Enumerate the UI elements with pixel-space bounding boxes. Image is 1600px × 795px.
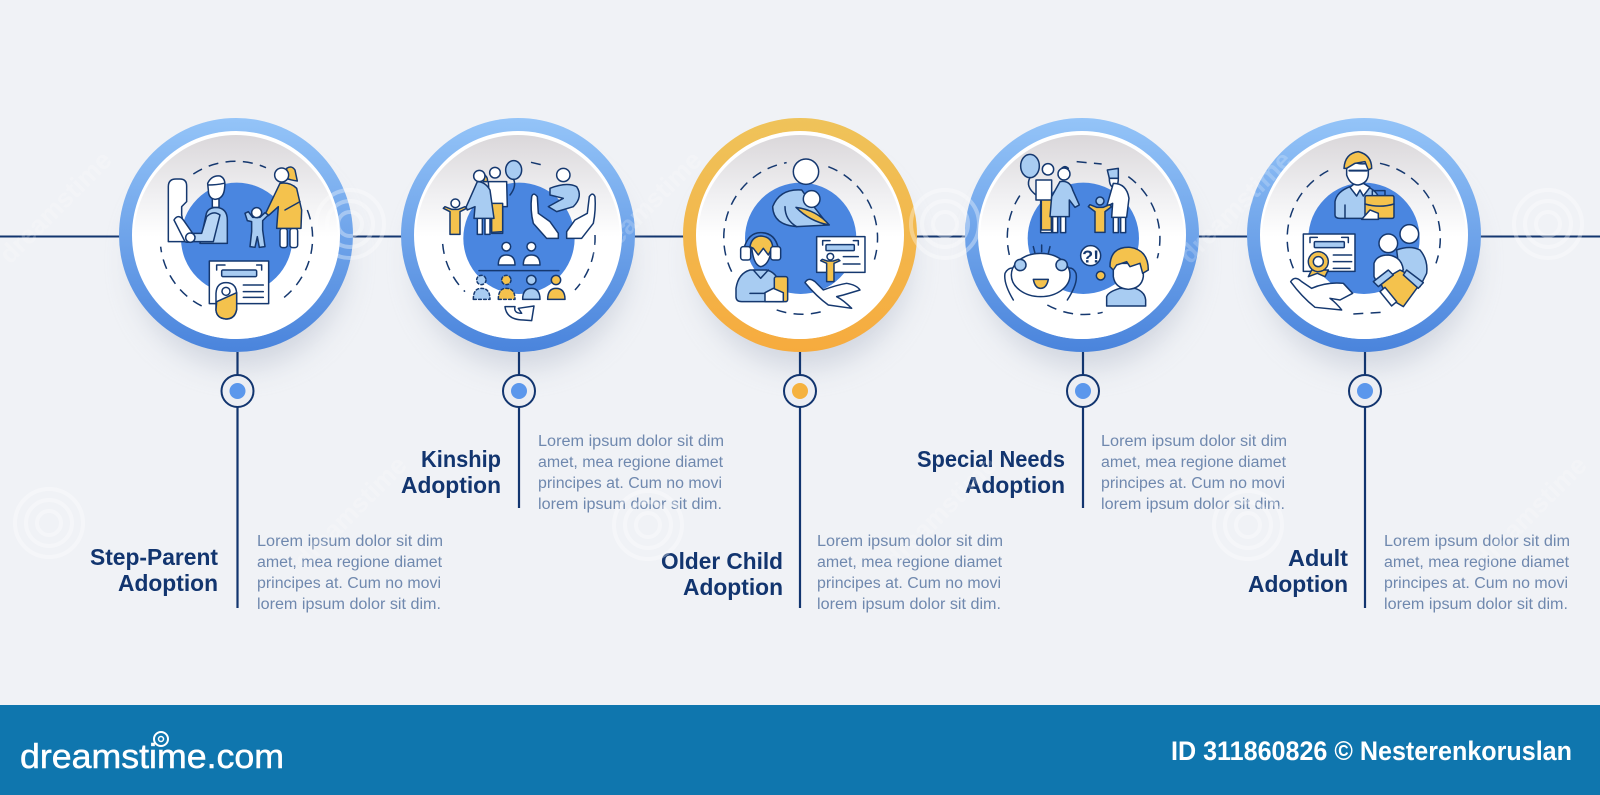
text: adult body: Lorem ipsum dolor sit dim [1384, 533, 1570, 550]
ring [965, 118, 1199, 352]
watermark overlay: dreamstime [1173, 145, 1297, 269]
text: kinship body: principes at. Cum no movi [538, 475, 722, 492]
icon: older child [724, 159, 878, 314]
text: special needs body: Lorem ipsum dolor sit dim [1101, 433, 1287, 450]
text: adult body [1384, 533, 1570, 613]
heading: special needs: Adoption [965, 472, 1065, 498]
text: special needs body: lorem ipsum dolor sit dim. [1101, 496, 1285, 513]
heading: special needs [917, 446, 1065, 498]
heading: step-parent: Step-Parent [90, 544, 218, 570]
watermark overlay: dreamstime [288, 450, 412, 574]
icon: step-parent family [161, 161, 313, 319]
text: special needs body: amet, mea regione diamet [1101, 454, 1287, 471]
horizontal connector line [0, 236, 1600, 238]
text: adult body: principes at. Cum no movi [1384, 575, 1568, 592]
heading: kinship: Kinship [421, 446, 501, 472]
text: older child body [817, 533, 1003, 613]
panel: adult adoption [1247, 118, 1481, 368]
icon: special needs [1005, 154, 1160, 315]
watermark overlay: dreamstime [1468, 450, 1592, 574]
footer credit: ID 311860826 © Nesterenkoruslan [1171, 736, 1572, 766]
heading: older child: Older Child [661, 548, 783, 574]
ring [1247, 118, 1481, 352]
text: adult body: amet, mea regione diamet [1384, 554, 1570, 571]
text: kinship body [538, 433, 724, 513]
watermark overlay [0, 145, 1592, 574]
heading: older child: Adoption [683, 574, 783, 600]
ring [119, 118, 353, 352]
ring [401, 118, 635, 352]
text: kinship body: Lorem ipsum dolor sit dim [538, 433, 724, 450]
heading: kinship [401, 446, 501, 498]
heading: older child [661, 548, 783, 600]
heading: step-parent [90, 544, 218, 596]
watermark overlay: dreamstime [878, 450, 1002, 574]
question mark label: ?! [1082, 246, 1099, 266]
text: older child body: Lorem ipsum dolor sit dim [817, 533, 1003, 550]
text: kinship body: amet, mea regione diamet [538, 454, 724, 471]
text: older child body: principes at. Cum no movi [817, 575, 1001, 592]
watermark overlay: dreamstime [583, 145, 707, 269]
heading: adult: Adoption [1248, 571, 1348, 597]
heading: adult: Adult [1288, 545, 1348, 571]
text: step-parent body: lorem ipsum dolor sit dim. [257, 596, 441, 613]
icon: adult adoption [1287, 152, 1440, 314]
text: special needs body: principes at. Cum no movi [1101, 475, 1285, 492]
text: adult body: lorem ipsum dolor sit dim. [1384, 596, 1568, 613]
text: kinship body: lorem ipsum dolor sit dim. [538, 496, 722, 513]
panel: kinship adoption [401, 118, 635, 368]
text: special needs body [1101, 433, 1287, 513]
heading: step-parent: Adoption [118, 570, 218, 596]
ring [683, 118, 917, 352]
text: older child body: lorem ipsum dolor sit dim. [817, 596, 1001, 613]
footer bar [0, 705, 1600, 795]
text: step-parent body [257, 533, 443, 613]
text: older child body: amet, mea regione diamet [817, 554, 1003, 571]
footer logo: dreamstime.com [20, 738, 284, 776]
icon: kinship family [443, 161, 595, 321]
heading: kinship: Adoption [401, 472, 501, 498]
text: step-parent body: Lorem ipsum dolor sit dim [257, 533, 443, 550]
step connectors [222, 352, 1381, 608]
text: step-parent body: principes at. Cum no movi [257, 575, 441, 592]
panel: step-parent adoption [119, 118, 353, 368]
heading: special needs: Special Needs [917, 446, 1065, 472]
panel: older child adoption [683, 118, 917, 368]
panel: special needs adoption [965, 118, 1199, 368]
text: step-parent body: amet, mea regione diamet [257, 554, 443, 571]
heading: adult [1248, 545, 1348, 597]
